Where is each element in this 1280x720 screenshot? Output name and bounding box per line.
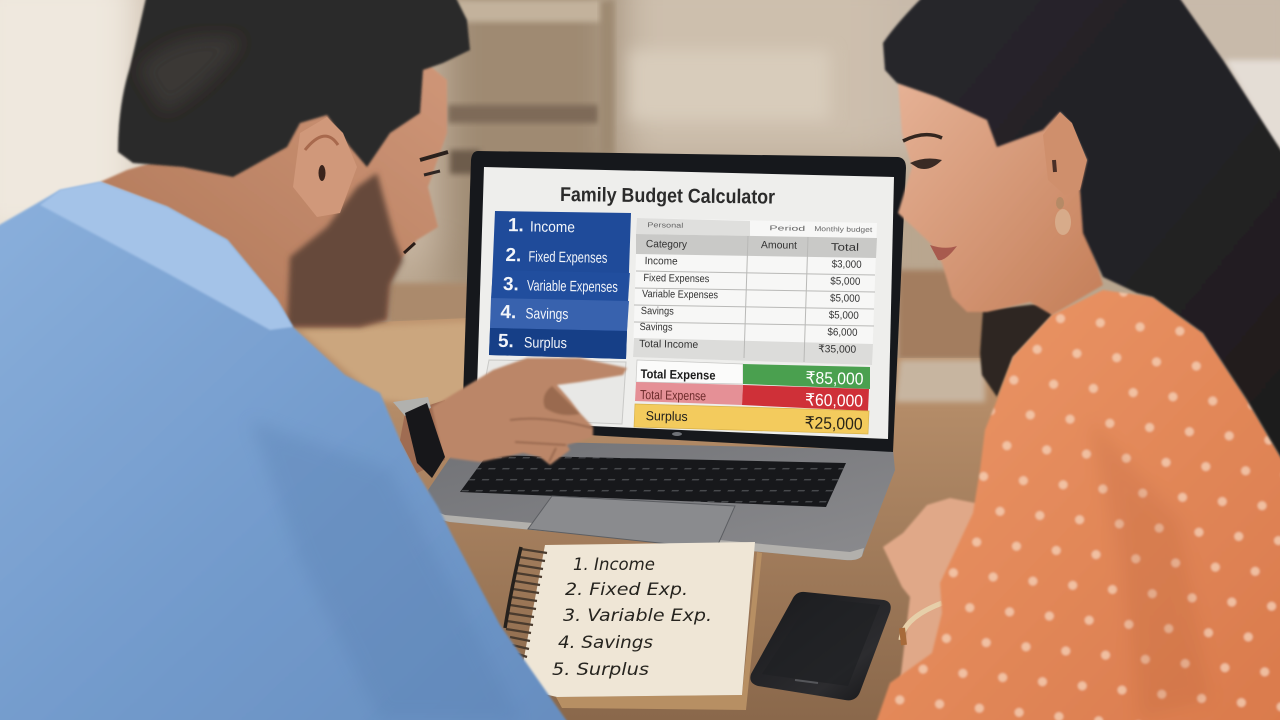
summary rows bbox=[634, 360, 870, 434]
table text: Personal bbox=[647, 222, 684, 230]
notebook page bbox=[523, 542, 755, 697]
table text: Category bbox=[646, 238, 688, 251]
step labels: 3. bbox=[503, 274, 519, 295]
handwritten list: 2. Fixed Exp. bbox=[565, 580, 688, 600]
summary labels and values: Total Expense bbox=[640, 367, 716, 383]
table text: Fixed Expenses bbox=[643, 272, 709, 285]
wristwatch bbox=[393, 397, 445, 478]
table text: $5,000 bbox=[830, 275, 861, 288]
beard bbox=[287, 173, 403, 327]
table text: Total bbox=[831, 241, 859, 254]
panel: numbered steps bbox=[489, 211, 631, 359]
step labels: 2. bbox=[505, 245, 521, 266]
step labels: Surplus bbox=[524, 334, 567, 352]
step labels: 1. bbox=[508, 215, 524, 236]
laptop display bbox=[476, 167, 894, 439]
neck and head bbox=[100, 60, 447, 327]
handwritten list: 4. Savings bbox=[558, 633, 653, 653]
step labels: Variable Expenses bbox=[527, 277, 618, 296]
table text: Variable Expenses bbox=[642, 288, 718, 301]
laptop base and keyboard bbox=[428, 440, 895, 560]
lower left screen panel bbox=[478, 360, 626, 424]
step labels: Fixed Expenses bbox=[528, 248, 608, 267]
summary labels and values: ₹85,000 bbox=[805, 368, 864, 389]
step labels: Savings bbox=[525, 305, 569, 323]
panel: budget table bbox=[633, 218, 877, 365]
woman bbox=[870, 0, 1280, 720]
smartphone bbox=[750, 592, 891, 700]
pointing hand bbox=[432, 358, 627, 465]
table text: Savings bbox=[641, 305, 674, 318]
man bbox=[0, 0, 627, 720]
shirt bbox=[0, 182, 580, 720]
table text: Savings bbox=[639, 321, 673, 334]
handwritten list: 3. Variable Exp. bbox=[563, 606, 712, 626]
ear and earring bbox=[1043, 112, 1087, 235]
summary labels and values: Surplus bbox=[646, 408, 688, 424]
handwritten list: 1. Income bbox=[573, 555, 655, 575]
wooden table bbox=[0, 318, 1280, 720]
eyebrow and eye bbox=[404, 152, 448, 253]
table text: Total Income bbox=[639, 338, 698, 351]
table text: Income bbox=[645, 255, 678, 268]
step labels: Income bbox=[530, 218, 575, 236]
laptop bbox=[428, 151, 906, 560]
table text: ₹35,000 bbox=[818, 343, 856, 356]
step labels: 5. bbox=[498, 331, 514, 352]
handwritten list bbox=[552, 555, 712, 680]
hand and bracelet bbox=[883, 498, 985, 682]
step labels bbox=[498, 215, 619, 354]
summary labels and values: Total Expense bbox=[640, 387, 706, 403]
step labels: 4. bbox=[500, 302, 516, 323]
notebook bbox=[505, 542, 762, 710]
hair bbox=[118, 0, 470, 177]
table text: $5,000 bbox=[829, 309, 859, 322]
facial features bbox=[903, 135, 957, 260]
shirt collar bbox=[40, 182, 293, 330]
summary labels and values: ₹60,000 bbox=[805, 390, 863, 411]
back hair bbox=[980, 303, 1052, 397]
kurta bbox=[870, 290, 1280, 720]
notebook cover bbox=[556, 552, 762, 710]
shirt fold shadow bbox=[250, 420, 520, 720]
table text: $3,000 bbox=[832, 258, 862, 271]
summary labels and values: ₹25,000 bbox=[804, 413, 863, 434]
forearm bbox=[400, 400, 445, 473]
table text: $6,000 bbox=[827, 326, 858, 339]
webcam notch bbox=[672, 432, 682, 436]
summary labels and values bbox=[639, 365, 864, 434]
hair bbox=[883, 0, 1280, 490]
table text: Period bbox=[769, 225, 806, 233]
table text: Monthly budget bbox=[814, 226, 872, 234]
neck and face bbox=[898, 75, 1103, 315]
table text: Amount bbox=[761, 239, 797, 252]
laptop screen bezel bbox=[462, 151, 906, 452]
spiral binding bbox=[505, 547, 547, 657]
table text: $5,000 bbox=[830, 292, 860, 305]
table text bbox=[639, 222, 872, 356]
ear bbox=[293, 117, 357, 217]
screen title: Family Budget Calculator bbox=[560, 184, 775, 209]
handwritten list: 5. Surplus bbox=[552, 660, 649, 680]
